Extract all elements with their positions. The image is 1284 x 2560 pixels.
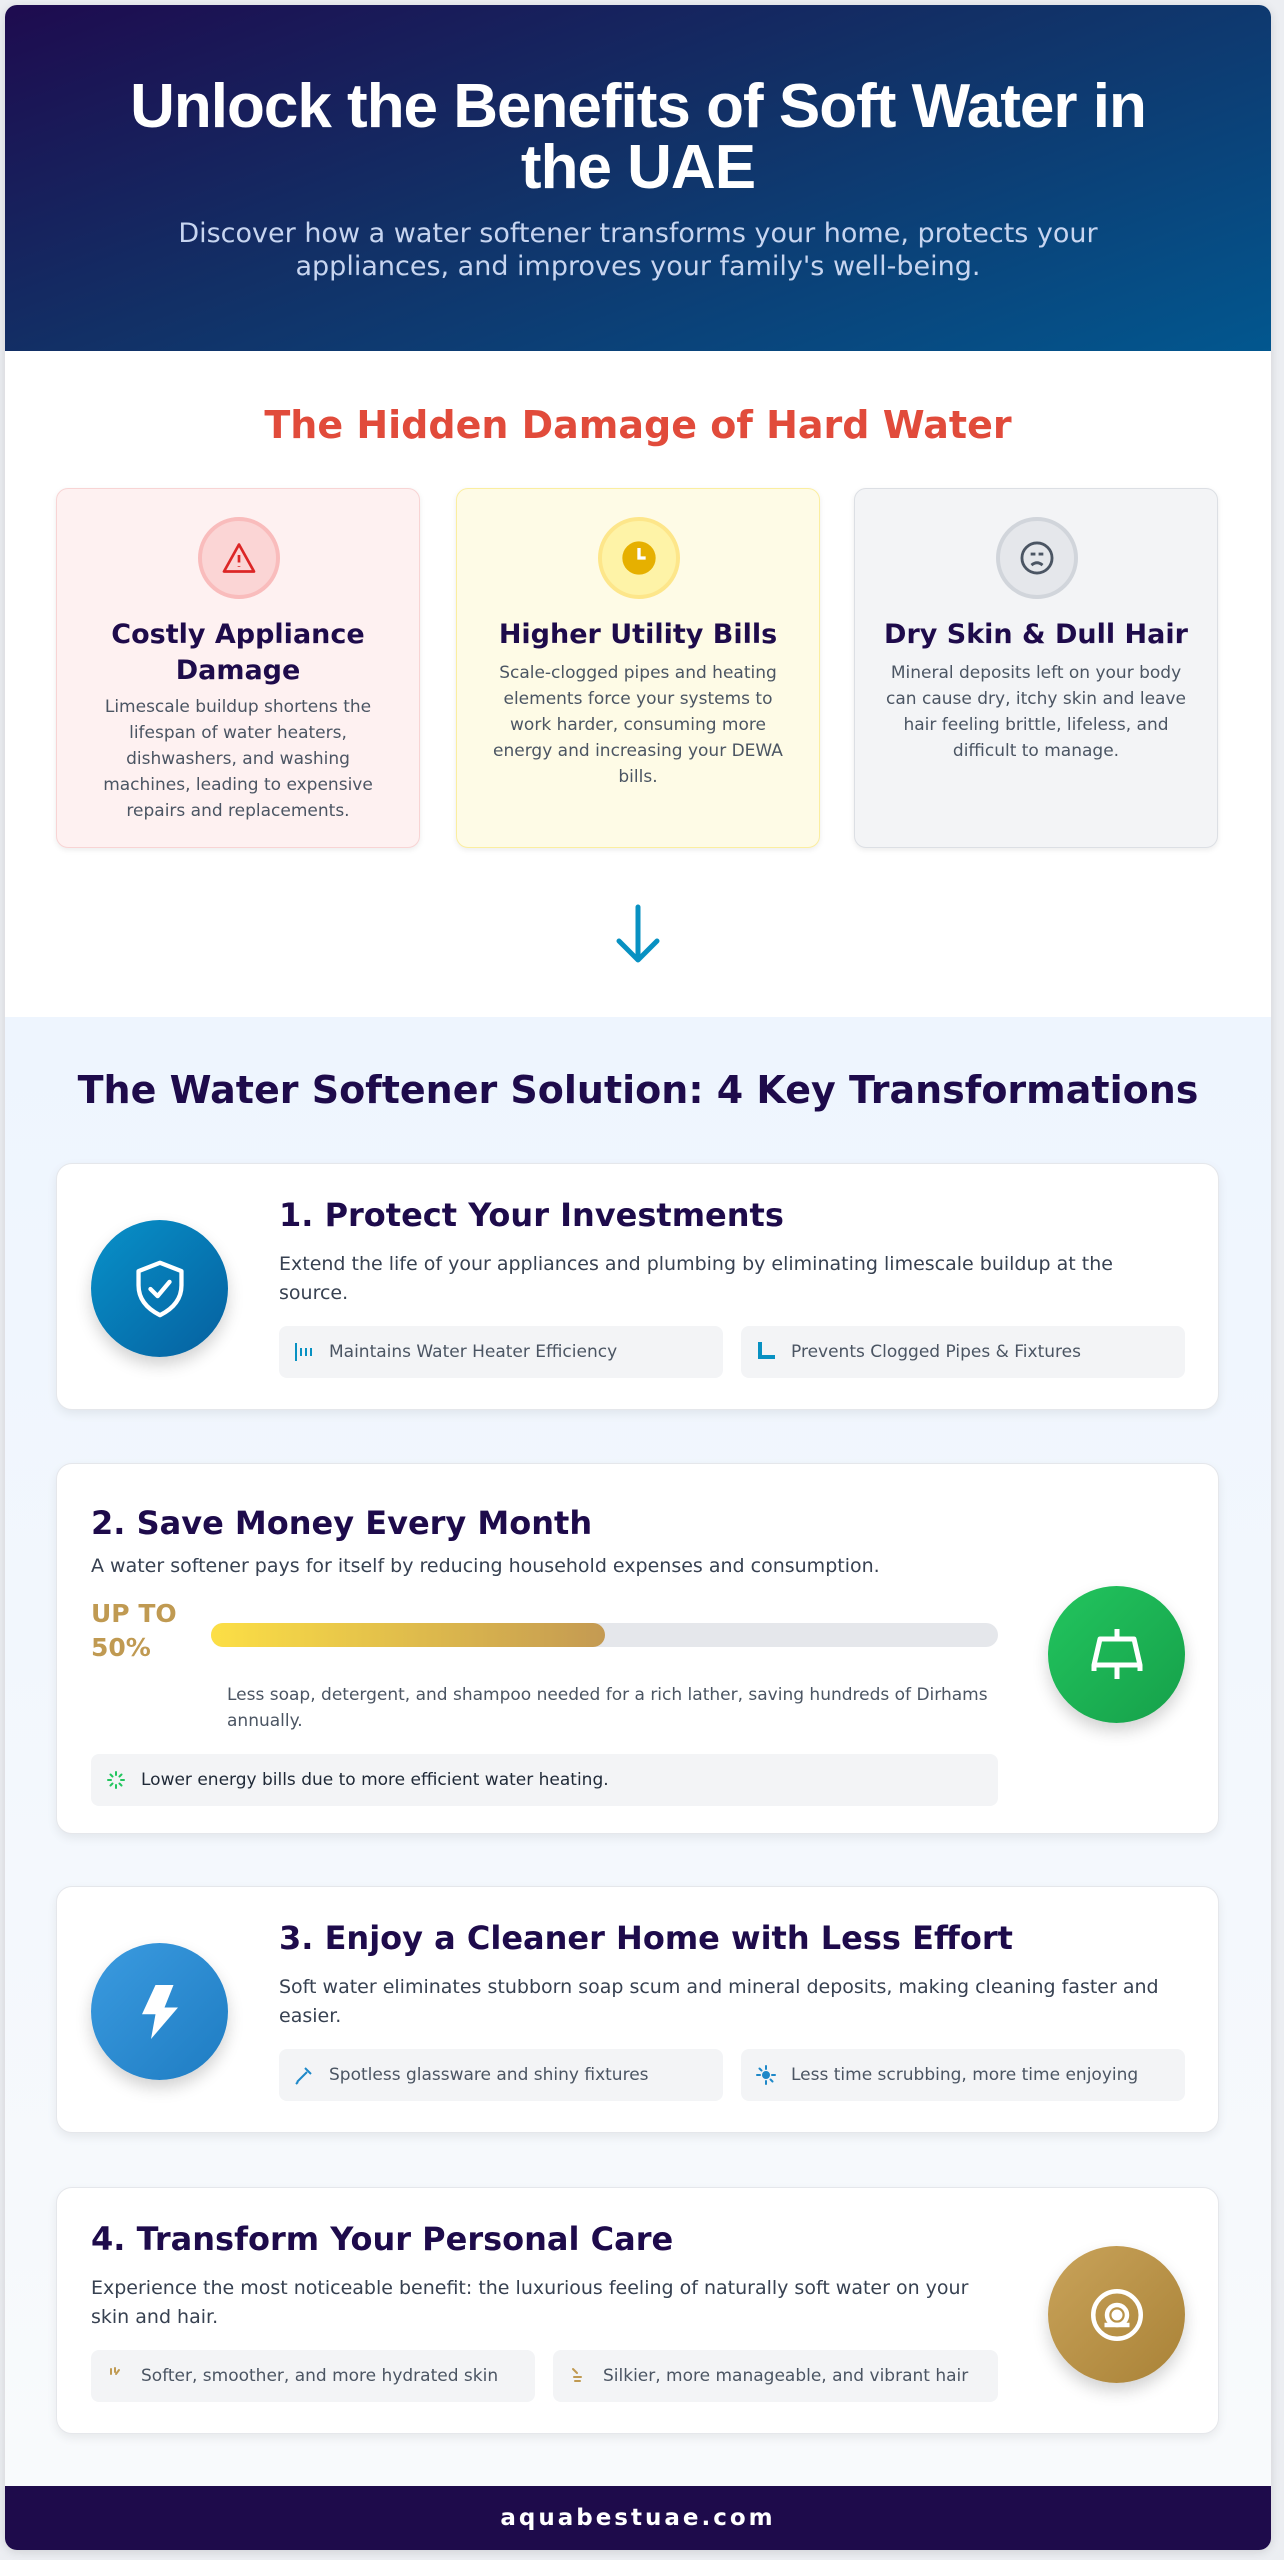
subtitle: Discover how a water softener transforms your home, protects your appliances, and improves your family's well-being. (178, 218, 1098, 282)
pill: heater: Maintains Water Heater Efficiency (329, 1342, 617, 1362)
footer: aquabestuae.com (500, 2505, 776, 2531)
card 2: save money: 2. Save Money Every Month (91, 1504, 592, 1542)
pill: energy: Lower energy bills due to more efficient water heating. (141, 1770, 609, 1790)
panel: solution section (5, 1017, 1271, 2486)
card 1: protect (56, 1163, 1219, 1410)
bar chart: savings (211, 1623, 998, 1647)
pill: hair (553, 2350, 998, 2402)
footer (5, 2486, 1271, 2550)
panel: appliance damage (56, 488, 420, 848)
pill: skin (91, 2350, 535, 2402)
panel: appliance damage: Limescale buildup shortens the lifespan of water heaters, dishwashers, and washing machines, leading to expensive repairs and replacements. (103, 697, 373, 821)
pill: glassware (279, 2049, 723, 2101)
pill: energy (91, 1754, 998, 1806)
header banner (5, 5, 1271, 351)
card 2: save money (56, 1463, 1219, 1834)
stat: up to 50%: 50% (91, 1633, 151, 1662)
pill: heater (279, 1326, 723, 1378)
heading: solution: The Water Softener Solution: 4 Key Transformations (78, 1068, 1198, 1112)
pill: hair: Silkier, more manageable, and vibrant hair (603, 2366, 968, 2386)
card 3: cleaner home: Soft water eliminates stubborn soap scum and mineral deposits, making cleaning faster and easier. (279, 1976, 1159, 2027)
card 3: cleaner home (56, 1886, 1219, 2133)
pill: glassware: Spotless glassware and shiny fixtures (329, 2065, 649, 2085)
panel: appliance damage: Costly Appliance Damage (111, 619, 365, 686)
stat: up to 50% (91, 1599, 177, 1662)
pill: pipes (741, 1326, 1185, 1378)
card 3: cleaner home: 3. Enjoy a Cleaner Home with Less Effort (279, 1919, 1013, 1957)
stat: up to 50%: UP TO (91, 1599, 177, 1628)
title: the UAE (521, 133, 755, 202)
icon: sad face (996, 517, 1078, 599)
title: Unlock the Benefits of Soft Water in (130, 72, 1146, 141)
card 4: personal care: 4. Transform Your Personal Care (91, 2220, 673, 2258)
icon: green circle (1048, 1586, 1185, 1723)
panel: dry skin (854, 488, 1218, 848)
icon: lightning (91, 1943, 228, 2080)
card 4: personal care (56, 2187, 1219, 2434)
card 2: save money: Less soap, detergent, and shampoo needed for a rich lather, saving hundreds of Dirhams annually. (227, 1685, 988, 1731)
panel: utility bills: Higher Utility Bills (499, 619, 777, 650)
arrow: down (616, 904, 660, 962)
pill: pipes: Prevents Clogged Pipes & Fixtures (791, 1342, 1081, 1362)
title (130, 72, 1146, 202)
panel: dry skin: Dry Skin & Dull Hair (884, 619, 1188, 650)
card 2: save money: A water softener pays for itself by reducing household expenses and consumption. (91, 1555, 880, 1577)
pill: skin: Softer, smoother, and more hydrated skin (141, 2366, 498, 2386)
icon: gold circle (1048, 2246, 1185, 2383)
card 4: personal care: Experience the most noticeable benefit: the luxurious feeling of naturally soft water on your skin and hair. (91, 2277, 968, 2328)
panel: dry skin: Mineral deposits left on your body can cause dry, itchy skin and leave hair feeling brittle, lifeless, and difficult to manage. (886, 663, 1186, 761)
card 1: protect: Extend the life of your appliances and plumbing by eliminating limescale buildup at the source. (279, 1253, 1113, 1304)
icon: clock (598, 517, 680, 599)
pill: less scrubbing: Less time scrubbing, more time enjoying (791, 2065, 1138, 2085)
panel: utility bills (456, 488, 820, 848)
icon: warning (198, 517, 280, 599)
pill: less scrubbing (741, 2049, 1185, 2101)
icon: shield (91, 1220, 228, 1357)
heading: hidden damage: The Hidden Damage of Hard Water (264, 403, 1012, 447)
panel: utility bills: Scale-clogged pipes and heating elements force your systems to work harder, consuming more energy and increasing your DEWA bills. (493, 663, 783, 787)
card 1: protect: 1. Protect Your Investments (279, 1196, 784, 1234)
